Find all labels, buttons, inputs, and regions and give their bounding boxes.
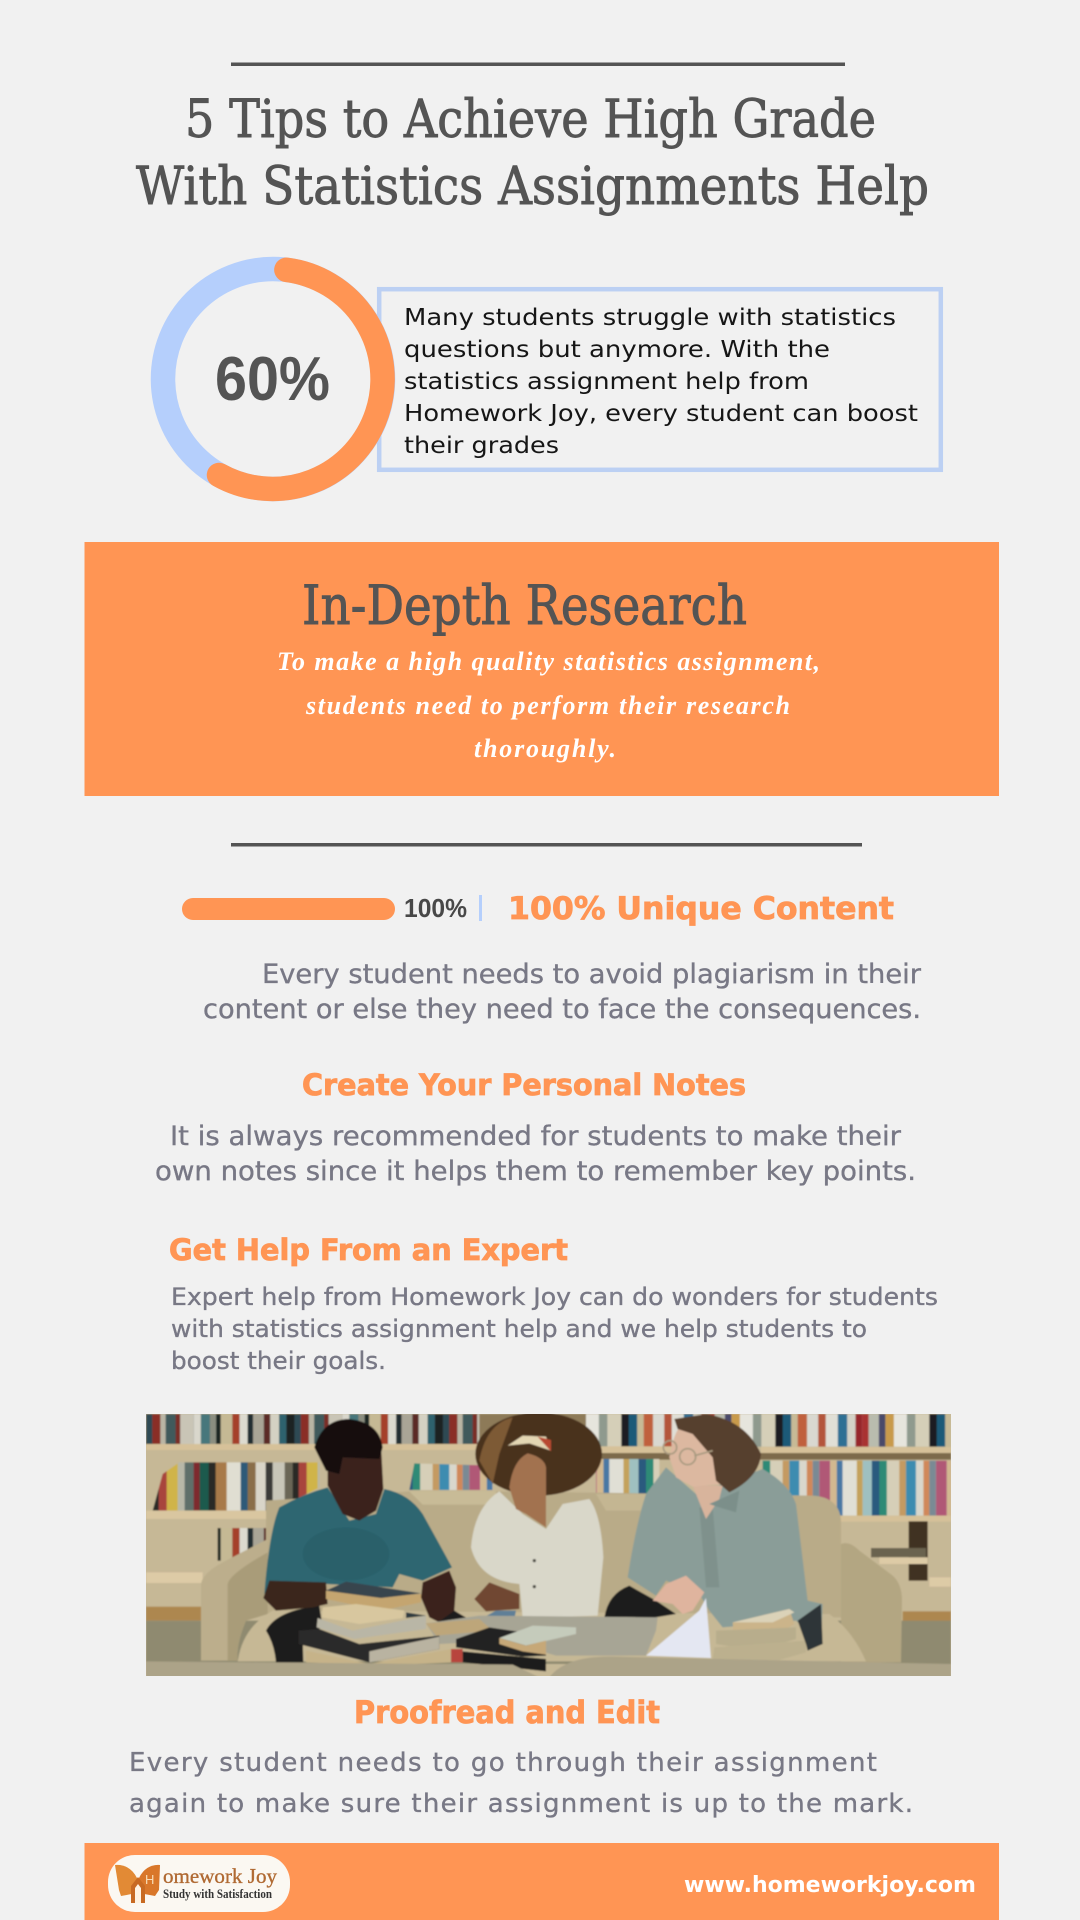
logo pill (108, 1855, 290, 1912)
panel text: thoroughly. (474, 734, 616, 763)
middle student (471, 1412, 603, 1619)
logo name: omework Joy (163, 1864, 278, 1888)
logo: homework joy (108, 1855, 290, 1912)
callout text: questions but anymore. With the (404, 337, 830, 363)
callout text: statistics assignment help from (404, 369, 809, 395)
bar fill (182, 898, 395, 920)
top divider line (231, 62, 845, 66)
donut track (163, 269, 383, 489)
table, papers and books (299, 1582, 823, 1671)
panel text (277, 647, 820, 763)
text: proofread: Every student needs to go through their assignment (129, 1748, 877, 1778)
donut chart: 60% (163, 269, 383, 489)
callout text: Homework Joy, every student can boost (404, 401, 918, 427)
intro callout box (379, 289, 941, 470)
right student (604, 1414, 823, 1644)
text: expert help: Expert help from Homework Joy can do wonders for students (171, 1283, 938, 1311)
progress bar: 100% (182, 893, 482, 923)
title: With Statistics Assignments Help (136, 157, 929, 217)
title (136, 90, 929, 217)
heading: expert help: Get Help From an Expert (169, 1233, 568, 1267)
callout text: Many students struggle with statistics (404, 305, 896, 331)
callout border (379, 289, 941, 470)
footer bar (84, 1843, 999, 1920)
panel heading: In-Depth Research (302, 574, 747, 637)
text: proofread (129, 1748, 913, 1819)
front cushion (146, 1657, 951, 1677)
text: proofread: again to make sure their assignment is up to the mark. (129, 1789, 913, 1819)
donut value: 60% (215, 345, 330, 414)
text: expert help (171, 1283, 938, 1375)
panel text: students need to perform their research (305, 691, 790, 720)
heading: proofread: Proofread and Edit (354, 1695, 660, 1731)
donut progress arc (219, 270, 383, 489)
text: unique content: content or else they need to face the consequences. (203, 994, 921, 1025)
section divider line (231, 843, 862, 846)
website url: www.homeworkjoy.com (684, 1873, 976, 1898)
icon: open book: H (145, 1872, 154, 1887)
panel background (84, 542, 999, 796)
text: unique content (203, 959, 922, 1025)
callout text (404, 305, 918, 459)
text: personal notes (155, 1121, 916, 1187)
icon: open book (115, 1865, 160, 1903)
heading: personal notes: Create Your Personal Notes (302, 1068, 746, 1102)
heading: unique content: 100% Unique Content (508, 891, 894, 927)
sofa (266, 1491, 841, 1617)
text: expert help: boost their goals. (171, 1347, 386, 1375)
panel text: To make a high quality statistics assignment, (277, 647, 820, 676)
left student (263, 1419, 467, 1662)
text: expert help: with statistics assignment help and we help students to (171, 1315, 867, 1343)
footer background (84, 1843, 999, 1920)
text: unique content: Every student needs to avoid plagiarism in their (262, 959, 922, 990)
text: personal notes: It is always recommended for students to make their (170, 1121, 902, 1152)
panel: in-depth research (84, 542, 999, 796)
logo tagline: Study with Satisfaction (163, 1887, 272, 1901)
callout text: their grades (404, 433, 559, 459)
text: personal notes: own notes since it helps them to remember key points. (155, 1156, 916, 1187)
bar separator (479, 895, 482, 921)
photo: students studying on a sofa in a library (146, 1414, 951, 1676)
title: 5 Tips to Achieve High Grade (185, 90, 876, 150)
bar value: 100% (404, 893, 467, 923)
